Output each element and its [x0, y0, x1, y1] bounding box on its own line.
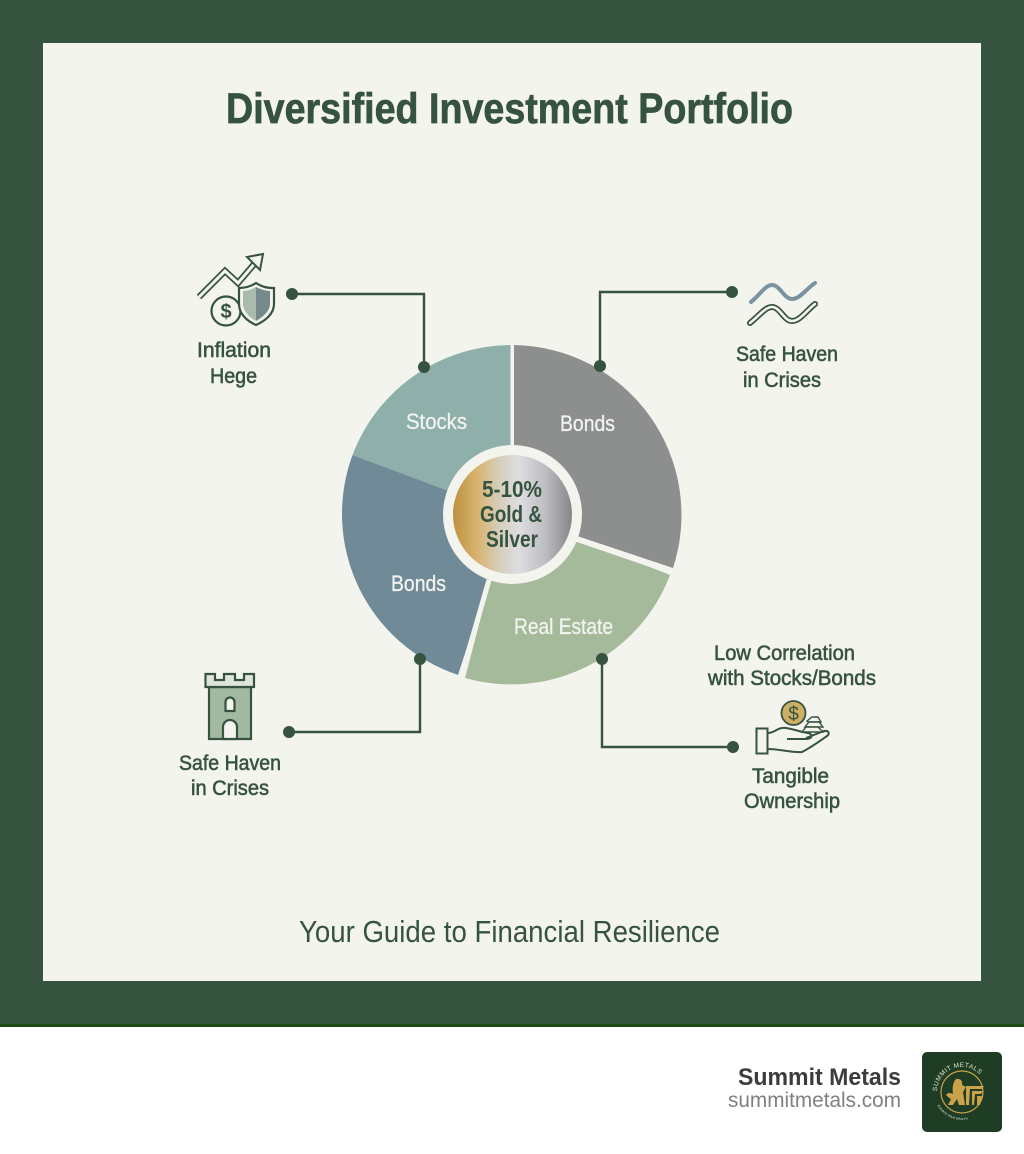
center label [480, 476, 542, 552]
footer brand name: Summit Metals [738, 1064, 901, 1091]
slice: stocks [352, 345, 510, 515]
center label: Gold & [480, 501, 542, 527]
label: tangible ownership [744, 765, 840, 813]
connector: safe haven in crises to bonds [283, 653, 426, 738]
title: Diversified Investment Portfolio [226, 85, 793, 133]
icon: castle tower [206, 674, 254, 739]
center label: 5-10% [482, 476, 542, 502]
label: low correlation [707, 642, 876, 690]
label: tangible ownership: Ownership [744, 790, 840, 813]
center metal disc [453, 455, 572, 574]
label: real estate: Real Estate [514, 614, 613, 639]
label: safe haven in crises right: in Crises [743, 369, 821, 392]
logo: SUMMIT METALS [932, 1062, 982, 1091]
slice: bonds left [342, 455, 512, 675]
label: tangible ownership: Tangible [752, 765, 829, 788]
label: inflation hedge: Inflation [197, 339, 271, 362]
label: safe haven in crises left: in Crises [191, 777, 269, 800]
icon: hand holding coin and bars: $ [788, 704, 799, 725]
label: low correlation: Low Correlation [714, 642, 855, 665]
slice: real estate [465, 515, 670, 684]
icon: waves [750, 283, 815, 323]
center ring [443, 445, 582, 584]
connector: inflation hedge to stocks [286, 288, 430, 373]
label: bonds right: Bonds [560, 411, 615, 436]
content panel [43, 43, 981, 981]
label: inflation hedge [197, 339, 271, 388]
slice gaps [461, 538, 672, 677]
icon: chart arrow, coin and shield: $ [220, 301, 232, 323]
center label: Silver [486, 526, 538, 552]
tagline: Your Guide to Financial Resilience [299, 914, 720, 949]
label: safe haven in crises right: Safe Haven [736, 343, 838, 366]
icon: hand holding coin and bars [756, 701, 829, 754]
label: low correlation: with Stocks/Bonds [707, 667, 876, 690]
label: safe haven in crises left: Safe Haven [179, 752, 281, 775]
connector: tangible ownership to real estate [596, 653, 739, 753]
label: stocks: Stocks [406, 409, 467, 434]
slice: bonds right [514, 345, 681, 568]
connector: safe haven to bonds [594, 286, 738, 372]
footer rule [0, 1024, 1024, 1027]
footer url: summitmetals.com [728, 1089, 901, 1112]
donut chart [342, 345, 681, 684]
label: safe haven in crises right [736, 343, 838, 392]
label: bonds left: Bonds [391, 571, 446, 596]
label: safe haven in crises left [179, 752, 281, 800]
icon: chart arrow, coin and shield [199, 254, 274, 326]
logo [922, 1052, 1002, 1132]
label: inflation hedge: Hege [210, 365, 257, 388]
logo: ELEVATE YOUR WEALTH [938, 1104, 968, 1120]
